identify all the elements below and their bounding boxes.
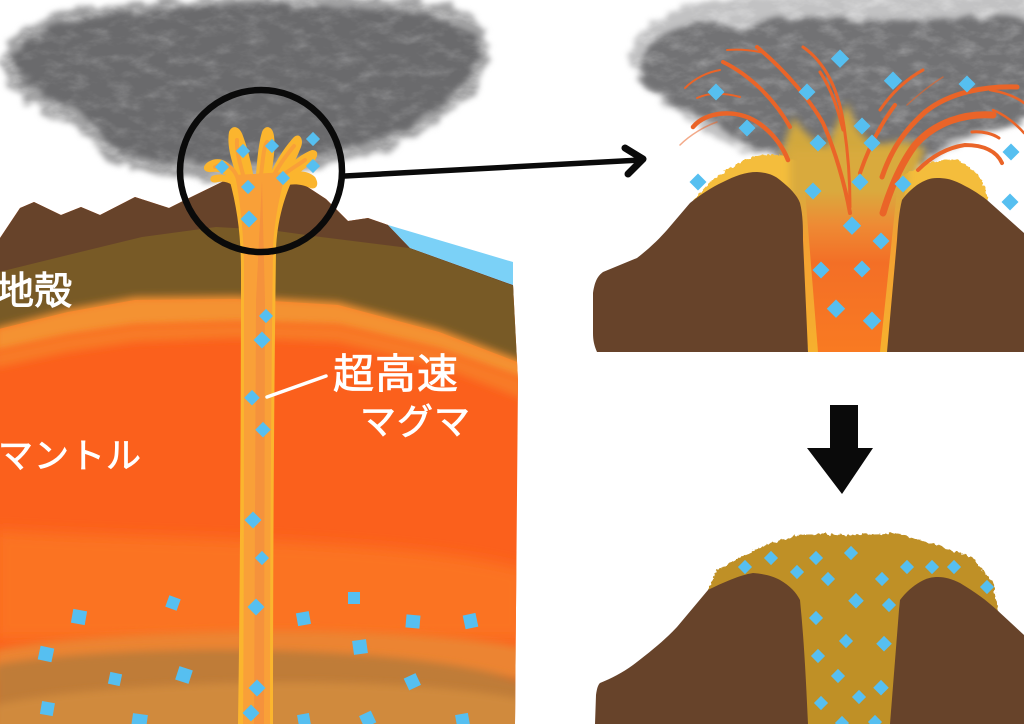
brown band	[0, 650, 525, 724]
ochre ash deposit	[706, 533, 998, 724]
mid mantle band	[0, 530, 525, 640]
panel: left cross-section of the earth	[0, 0, 525, 724]
label: super-fast magma	[267, 351, 471, 442]
mountain surface	[0, 182, 514, 294]
ash cloud: large plume	[2, 0, 488, 179]
label: mantle: マントル	[0, 437, 142, 476]
splash fingers	[204, 127, 317, 195]
ocean sliver	[388, 225, 513, 285]
arrow: to eruption detail	[345, 148, 643, 176]
earth layers	[0, 170, 525, 724]
yellow lava rim	[692, 155, 988, 215]
column outer	[229, 176, 294, 724]
vent magma core	[805, 190, 897, 352]
panel: eruption detail	[593, 0, 1024, 352]
column inner	[235, 172, 286, 724]
yellow ash plume	[780, 103, 925, 205]
label: super-fast magma: 超高速	[333, 351, 459, 397]
deepest band	[0, 682, 525, 724]
base mantle	[0, 170, 525, 724]
upper mantle glow	[0, 323, 525, 400]
finger inner strokes	[215, 140, 305, 190]
ash cloud: eruption	[630, 0, 1024, 170]
column streaks	[254, 180, 265, 724]
right cone	[890, 577, 1024, 724]
blue particles: after eruption	[738, 546, 994, 724]
crust band	[0, 227, 525, 365]
blue particles: left panel	[38, 132, 478, 724]
lower mantle light band	[0, 631, 525, 680]
crust to mantle transition	[0, 296, 525, 380]
vent magma edge	[795, 190, 905, 352]
magma column	[204, 127, 317, 724]
panel: after eruption, ash filled volcano	[595, 533, 1024, 724]
zoom circle	[180, 90, 342, 252]
right volcano flank	[887, 178, 1024, 352]
plume base glow	[790, 150, 910, 200]
left volcano flank	[593, 172, 808, 352]
blue particles: eruption	[690, 50, 1019, 330]
label: super-fast magma: マグマ	[360, 401, 471, 442]
arrow: down	[807, 405, 873, 494]
left cone	[595, 573, 808, 724]
lava streaks	[680, 47, 1024, 213]
